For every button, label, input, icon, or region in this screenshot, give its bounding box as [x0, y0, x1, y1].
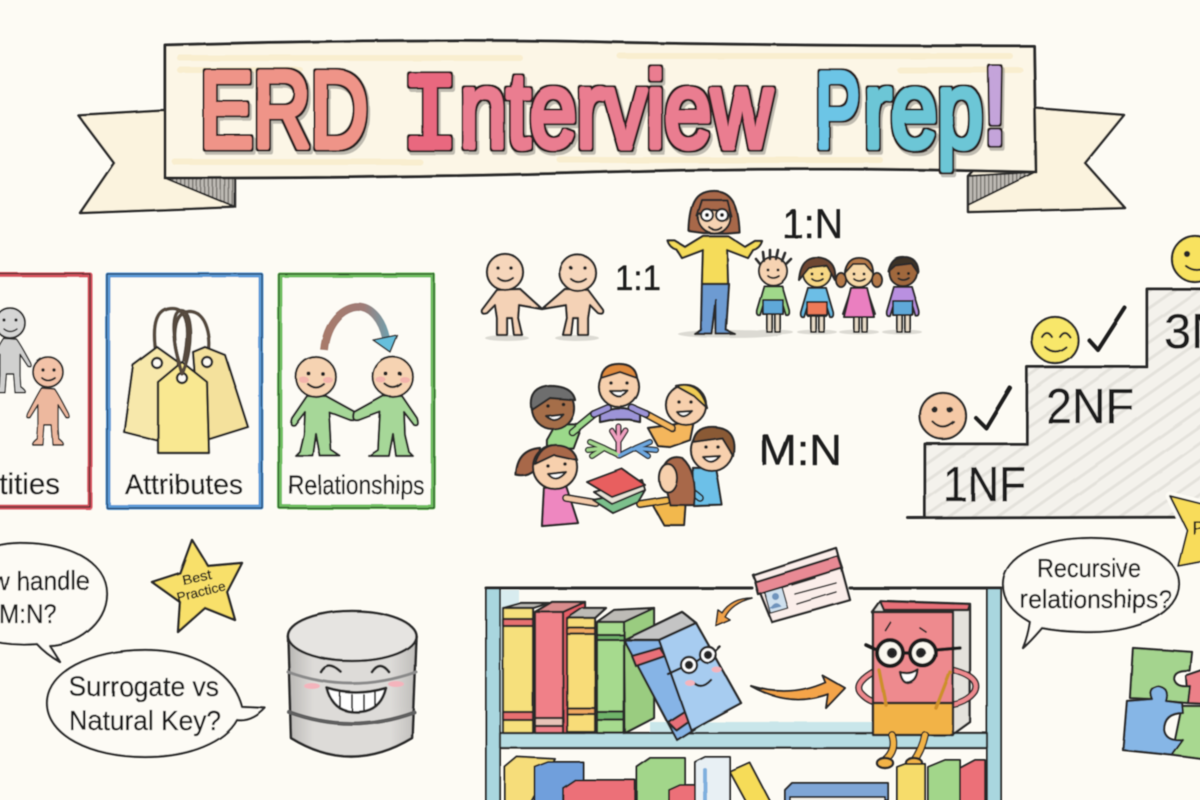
orange arrow to character [751, 675, 845, 708]
label: 2NF: 2NF [1046, 380, 1134, 434]
child: green shirt [756, 250, 791, 332]
icon: two people holding hands [291, 357, 418, 456]
title text: ! [984, 45, 1006, 166]
label: attributes: Attributes [125, 469, 243, 500]
teacher figure [668, 191, 782, 338]
tilted blue book character [624, 612, 741, 740]
title text: nterview [460, 49, 773, 170]
title banner [78, 41, 1125, 213]
label: 1NF: 1NF [943, 458, 1026, 512]
icon: grey person [0, 308, 31, 393]
small arrow to blue book [716, 598, 752, 626]
icon: yellow smiley with check [1032, 308, 1125, 363]
puzzle: blue piece [1123, 686, 1183, 755]
title text: ERD [200, 49, 368, 170]
heads [516, 364, 734, 505]
red book character [859, 601, 976, 768]
icon: curved arrow [324, 307, 397, 352]
label: 1:1: 1:1 [615, 259, 661, 298]
icon: peach person [27, 357, 69, 445]
children row [753, 250, 922, 334]
bubble: surrogate vs natural key: Natural Key? [69, 705, 221, 736]
bookshelf [486, 548, 1001, 800]
child: pink dress [836, 258, 882, 332]
bubble: how handle M:N: M:N? [0, 599, 57, 629]
shelf frame [486, 588, 1001, 800]
panel: attributes [107, 274, 262, 508]
icon: top smiley [1172, 236, 1200, 282]
title text: I [402, 58, 458, 180]
banner folds [165, 172, 1035, 207]
1:1 figures [482, 254, 603, 341]
icon: best practice star: Practice [175, 578, 227, 605]
bubble: recursive relationships: relationships? [1020, 584, 1172, 614]
M:N children circle [516, 364, 734, 526]
arms joining the circle [566, 408, 700, 504]
id card [753, 548, 850, 622]
bubble: how handle M:N [0, 543, 107, 662]
banner left tail [78, 110, 235, 213]
child: purple shirt [887, 257, 919, 332]
label: 1:N: 1:N [782, 200, 843, 247]
upper row books [503, 602, 654, 733]
icon: coloured hands [588, 427, 656, 456]
icon: peach smiley with check [920, 388, 1010, 439]
banner right tail [968, 108, 1125, 212]
panel: relationships [279, 274, 434, 508]
icon: smiling database [288, 611, 416, 756]
icon: puzzle pieces [1123, 648, 1200, 760]
puzzle: green piece [1130, 648, 1192, 703]
title text [200, 45, 1006, 180]
bubble: recursive relationships [1003, 538, 1179, 648]
bubble: recursive relationships: Recursive [1037, 553, 1141, 583]
panel: entities [0, 274, 90, 507]
banner crayon streaks [175, 56, 1020, 162]
bodies [542, 408, 722, 526]
bubble: surrogate vs natural key: Surrogate vs [69, 671, 219, 702]
icon: tags [124, 308, 248, 453]
lower row books [505, 757, 985, 800]
banner main [165, 41, 1036, 178]
normalization stairs [908, 236, 1200, 518]
icon: best practice star [152, 540, 242, 632]
icon: star badge right [1170, 496, 1200, 566]
title text: rep [864, 49, 983, 170]
title text: P [815, 49, 860, 170]
child: blue shirt [799, 258, 835, 332]
bubble: surrogate vs natural key [47, 650, 265, 757]
icon: stack of books [587, 469, 645, 513]
label: M:N: M:N [759, 426, 842, 475]
label: relationships: Relationships [288, 470, 424, 500]
puzzle: red piece [1186, 668, 1200, 704]
puzzle: lower right green piece [1172, 706, 1200, 760]
icon: best practice star: Best [180, 566, 213, 588]
